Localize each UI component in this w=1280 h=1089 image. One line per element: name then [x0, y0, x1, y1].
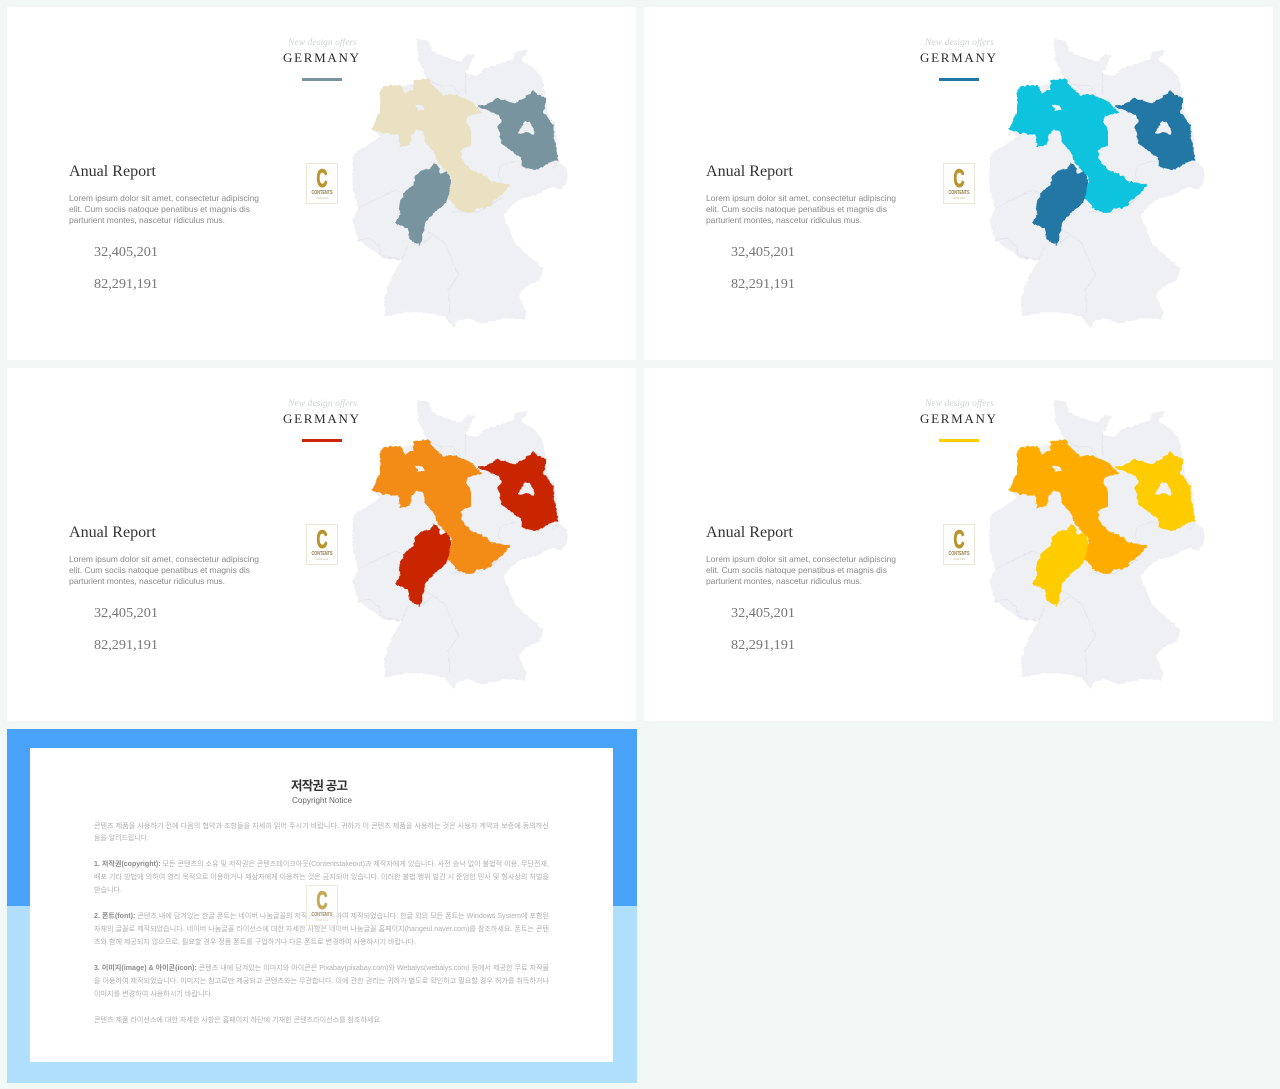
heading: Germany: [920, 37, 997, 81]
heading: copyright notice: 저작권 공고: [291, 778, 348, 793]
text block: annual report: [706, 163, 896, 292]
heading: Germany: New design offers: [287, 398, 358, 408]
text block: annual report: 82,291,191: [731, 277, 795, 292]
text block: annual report: Anual Report: [706, 163, 794, 180]
heading: Germany: GERMANY: [920, 411, 997, 426]
panel: Germany orange and red: [7, 368, 636, 721]
text block: notice body: 1. 저작권(copyright): 모든 콘텐츠의 소유 및 저작권은 콘텐츠테이크아웃(Contentstakeout)과 제작자에게 있습니다. 사전 승낙 없이 불법적 이용, 무단전재,: [94, 859, 549, 868]
text block: notice body: 자체의 글꼴로 제작되었습니다. 네이버 나눔글꼴 라이선스에 대한 자세한 사항은 네이버 나눔글꼴 홈페이지(hangeul.naver.com)를 참조하세요. 폰트는 콘텐: [94, 924, 549, 933]
text block: annual report: Lorem ipsum dolor sit amet, consectetur adipiscing: [706, 193, 896, 203]
text block: annual report: elit. Cum sociis natoque penatibus et magnis dis: [69, 565, 250, 575]
text block: annual report: 32,405,201: [731, 606, 795, 621]
heading: Germany: GERMANY: [283, 50, 360, 65]
icon: logo: [306, 164, 338, 204]
icon: logo: [944, 524, 974, 564]
heading: copyright notice: Copyright Notice: [292, 795, 352, 805]
text block: annual report: elit. Cum sociis natoque penatibus et magnis dis: [69, 204, 250, 214]
text block: annual report: [69, 524, 259, 653]
text block: annual report: parturient montes, nascetur ridiculus mus.: [706, 215, 862, 225]
text block: annual report: parturient montes, nascetur ridiculus mus.: [706, 576, 862, 586]
heading: Germany: [920, 398, 997, 442]
text block: annual report: elit. Cum sociis natoque penatibus et magnis dis: [706, 565, 887, 575]
panel: Germany slate and beige: [7, 7, 636, 360]
text block: annual report: Anual Report: [69, 163, 157, 180]
text block: notice body: 콘텐츠 제품을 사용하기 전에 다음의 협약과 조항들을 자세히 읽어 주시기 바랍니다. 귀하가 이 콘텐츠 제품을 사용하는 것은 사용자 계약과 보증에 동의하신: [94, 821, 549, 830]
text block: annual report: Anual Report: [69, 524, 157, 541]
text block: annual report: 32,405,201: [731, 245, 795, 260]
text block: annual report: [706, 524, 896, 653]
panel: Germany cyan and blue: [644, 7, 1273, 360]
map: Germany: [989, 400, 1205, 689]
text block: notice body: 츠와 함께 제공되지 않으므로, 필요할 경우 정품 폰트를 구입하거나 다른 폰트로 변경하여 사용하시기 바랍니다.: [94, 937, 416, 946]
text block: notice body: [94, 821, 550, 1024]
text block: annual report: 32,405,201: [94, 606, 158, 621]
icon: logo: [306, 524, 338, 564]
text block: annual report: Lorem ipsum dolor sit amet, consectetur adipiscing: [69, 193, 259, 203]
heading: Germany: [283, 37, 360, 81]
text block: notice body: 받습니다.: [94, 885, 122, 894]
text block: annual report: 82,291,191: [94, 638, 158, 653]
text block: notice body: 이미지를 변경하여 사용하시기 바랍니다.: [94, 989, 213, 998]
heading: Germany: [283, 398, 360, 442]
text block: annual report: Anual Report: [706, 524, 794, 541]
icon: logo: [944, 164, 974, 204]
text block: annual report: Lorem ipsum dolor sit amet, consectetur adipiscing: [69, 554, 259, 564]
map: Germany: [989, 39, 1205, 328]
text block: notice body: 을 이용하여 제작되었습니다. 이미지는 참고로만 제공되고 콘텐츠와는 무관합니다. 이에 관한 권리는 귀하가 별도로 확인하고 필요할 경우 허가를 취득하거나: [94, 976, 550, 985]
map: Germany: [352, 39, 568, 328]
map: Germany: [352, 400, 568, 689]
heading: Germany: New design offers: [287, 37, 358, 47]
icon: logo overlay: [306, 886, 338, 926]
text block: notice body: 콘텐츠 제품 라이선스에 대한 자세한 사항은 홈페이지 하단에 기재한 콘텐츠라이선스를 참조하세요.: [94, 1015, 382, 1024]
text block: annual report: parturient montes, nascetur ridiculus mus.: [69, 215, 225, 225]
text block: notice body: 3. 이미지(image) & 아이콘(icon): 콘텐츠 내에 담겨있는 이미지와 아이콘은 Pixabay(pixabay.com)와 Webalys(webalys.com) 등에서 제공한 무료 저작물: [94, 963, 550, 972]
text block: annual report: Lorem ipsum dolor sit amet, consectetur adipiscing: [706, 554, 896, 564]
text block: annual report: 32,405,201: [94, 245, 158, 260]
heading: Germany: New design offers: [924, 37, 995, 47]
heading: Germany: GERMANY: [283, 411, 360, 426]
heading: copyright notice: [291, 778, 352, 805]
panel: Germany amber and yellow: [644, 368, 1273, 721]
text block: notice body: 2. 폰트(font): 콘텐츠 내에 담겨있는 한글 폰트는 네이버 나눔글꼴의 저작권을 준수하여 제작되었습니다. 한글 외의 모든 폰트는 Windows System에 포함된: [94, 911, 549, 920]
text block: annual report: 82,291,191: [731, 638, 795, 653]
text block: annual report: [69, 163, 259, 292]
text block: notice body: 음을 알려드립니다.: [94, 833, 149, 842]
text block: annual report: 82,291,191: [94, 277, 158, 292]
text block: annual report: parturient montes, nascetur ridiculus mus.: [69, 576, 225, 586]
panel: copyright notice: [7, 729, 637, 1083]
text block: annual report: elit. Cum sociis natoque penatibus et magnis dis: [706, 204, 887, 214]
text block: notice body: 배포 기타 방법에 의하여 영리 목적으로 이용하거나 제삼자에게 이용하는 것은 금지되어 있습니다. 이러한 불법 행위 발견 시 준엄한 민사 및 형사상의 처벌을: [94, 872, 550, 881]
heading: Germany: New design offers: [924, 398, 995, 408]
heading: Germany: GERMANY: [920, 50, 997, 65]
